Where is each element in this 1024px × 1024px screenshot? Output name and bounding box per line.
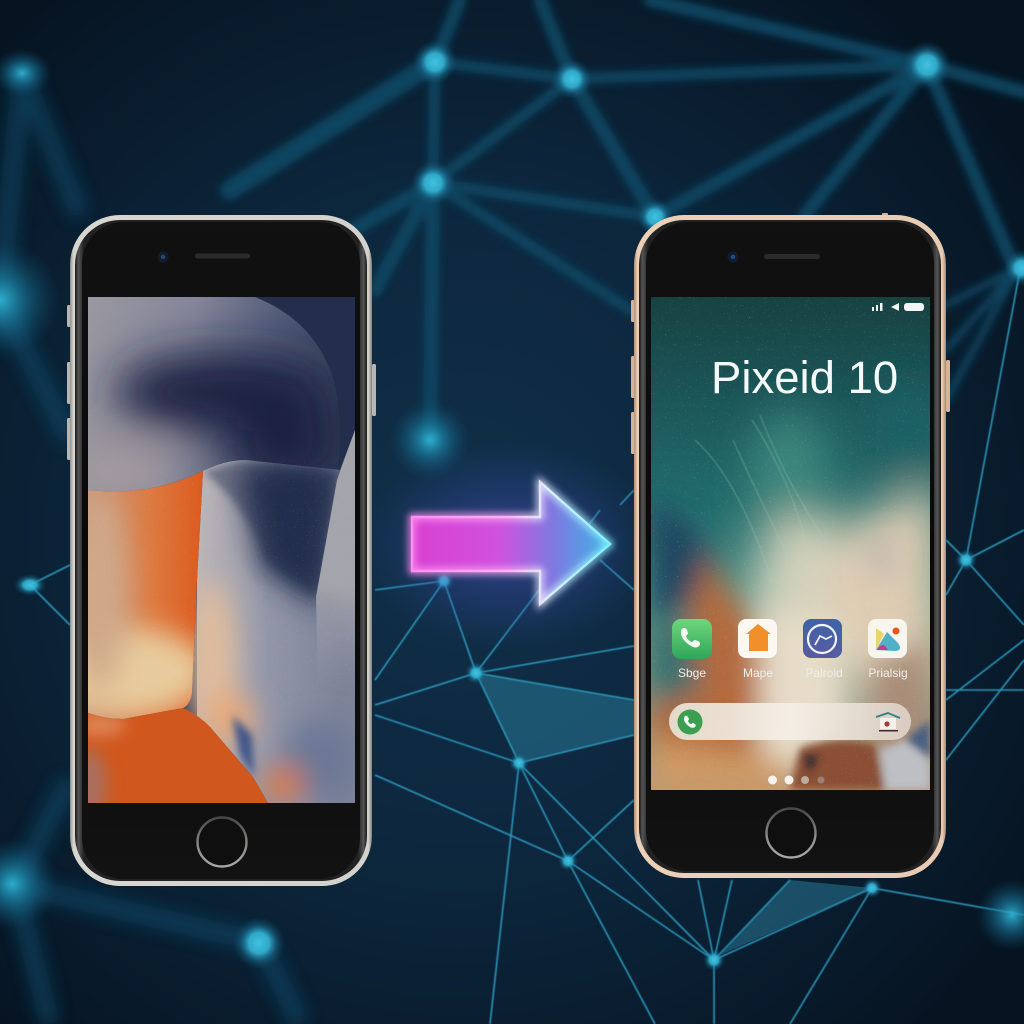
right phone rim	[639, 220, 941, 873]
app labels: Palroid	[805, 666, 843, 680]
network: lower mesh polygons	[476, 673, 872, 955]
left phone wallpaper	[88, 297, 355, 803]
left phone	[50, 215, 376, 886]
arrow	[360, 440, 660, 650]
right phone body	[634, 215, 946, 878]
app labels	[678, 666, 908, 680]
right phone side buttons	[631, 213, 950, 454]
status bar icons	[872, 303, 924, 311]
left phone home button	[198, 818, 246, 866]
right phone speaker	[764, 254, 820, 259]
right phone camera	[728, 252, 738, 262]
left phone bezel	[82, 222, 360, 879]
title: Pixeid 10	[711, 352, 898, 403]
right phone home button	[766, 808, 816, 858]
right phone	[631, 213, 950, 878]
app icon: home	[738, 619, 777, 658]
app icon: photos	[868, 619, 907, 658]
left phone camera	[158, 252, 168, 262]
app icon: blue compass	[803, 619, 842, 658]
left phone side buttons	[67, 305, 376, 460]
app icon: green phone	[672, 619, 712, 659]
left phone body	[70, 215, 372, 886]
network: upper blurred mesh lines	[230, 0, 1024, 440]
left phone rim	[75, 220, 367, 881]
search bar	[669, 703, 911, 740]
app labels: Mape	[743, 666, 773, 680]
page dots	[768, 776, 824, 784]
app labels: Sbge	[678, 666, 706, 680]
network: lower mesh lines	[30, 270, 1024, 1024]
left phone speaker	[195, 254, 250, 258]
right phone wallpaper	[651, 297, 940, 790]
right phone bezel	[646, 222, 934, 871]
network: left blurred glow lines	[0, 73, 300, 1024]
app labels: Prialsig	[868, 666, 908, 680]
